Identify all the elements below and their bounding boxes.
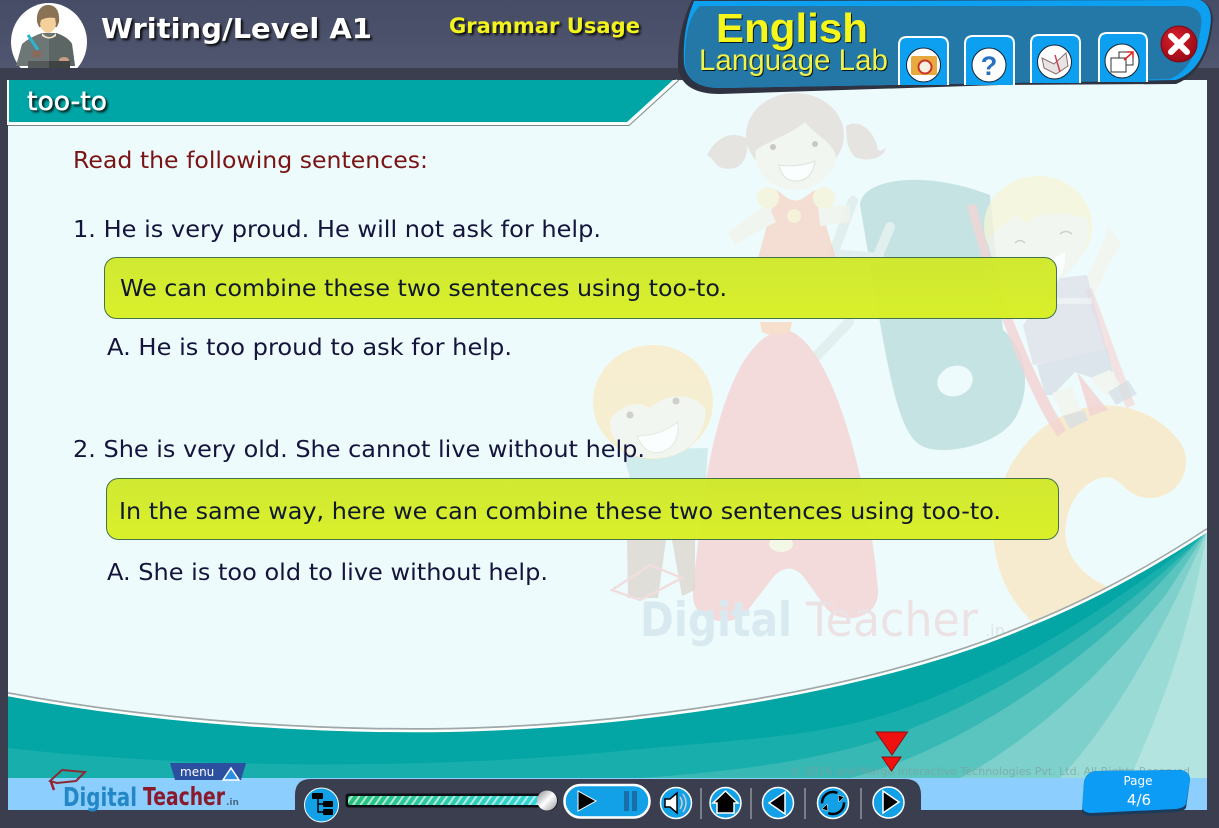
intro line: Read the following sentences: [73,148,428,174]
button: replay [818,788,848,818]
heading: Writing/Level A1: Writing/Level A1 [101,12,372,45]
right boy [984,176,1137,429]
topic banner [8,80,679,126]
button: previous [762,788,794,818]
answer 1: A. He is too proud to ask for help. [107,335,512,361]
separator [750,788,752,819]
Digital Teacher logo: .in [226,798,239,808]
ladder rails [808,201,890,365]
watermark logo: Digital [640,593,792,648]
English Language Lab header tab [678,0,1213,94]
button: home [710,788,741,818]
tab: timer folder [899,37,948,85]
letter B [860,180,1025,450]
heading: Grammar Usage: Grammar Usage [449,14,640,38]
girl [707,93,886,258]
separator [860,788,862,819]
sentence 1: 1. He is very proud. He will not ask for help. [73,217,601,243]
separator [804,788,806,819]
watermark logo: .in [985,621,1005,640]
letter C [1029,441,1150,626]
page counter badge: 4/6 [1127,791,1151,809]
title: English: English [716,5,868,51]
callout 1: We can combine these two sentences using too-to. [120,276,727,302]
close button [1161,26,1197,62]
button: next [873,787,904,818]
page counter badge [1082,770,1190,816]
tab: window [1099,33,1147,82]
letter A [693,329,878,621]
tab: help: ? [981,51,997,81]
left boy [593,345,713,598]
bottom light blue strip [8,778,1207,810]
progress bar [346,790,558,811]
menu tab [170,763,246,780]
bottom teal wave [8,520,1207,780]
Digital Teacher logo: Digital [63,783,137,813]
watermark logo: Teacher [805,593,979,648]
bottom frame [0,810,1219,828]
hole in letter A [769,536,793,552]
sentence 2: 2. She is very old. She cannot live without help. [73,437,645,463]
slide [967,204,1135,437]
shoes of the girl [760,322,792,335]
title: Language Lab: Language Lab [699,44,888,77]
watermark logo [612,565,1005,648]
button: sound [660,788,692,818]
letter B hole [933,361,977,401]
red down arrow marker [876,732,908,771]
header bar [0,0,1219,80]
menu tab: menu [180,765,214,779]
callout 1 [104,258,1056,318]
page counter badge: Page [1123,774,1153,788]
background illustration: ABC letters and children [593,93,1150,648]
tab: help [965,36,1014,85]
left frame edge [0,80,8,828]
Digital Teacher logo: Teacher [143,782,225,811]
Digital Teacher logo [50,770,239,813]
tab: book [1031,35,1080,83]
play and pause pill [564,785,650,818]
right frame edge [1207,80,1219,828]
copyright note: © 2016 and Margo Interactive Technologies Pvt. Ltd. All Rights Reserved [790,766,1190,778]
answer 2: A. She is too old to live without help. [107,560,548,586]
control bar [295,779,921,828]
callout 2: In the same way, here we can combine these two sentences using too-to. [119,499,1001,525]
separator [700,788,702,819]
avatar: writing student [11,3,87,68]
callout 2 [106,478,1058,540]
banner title: too-to [27,87,107,117]
button: page tree [304,788,338,822]
